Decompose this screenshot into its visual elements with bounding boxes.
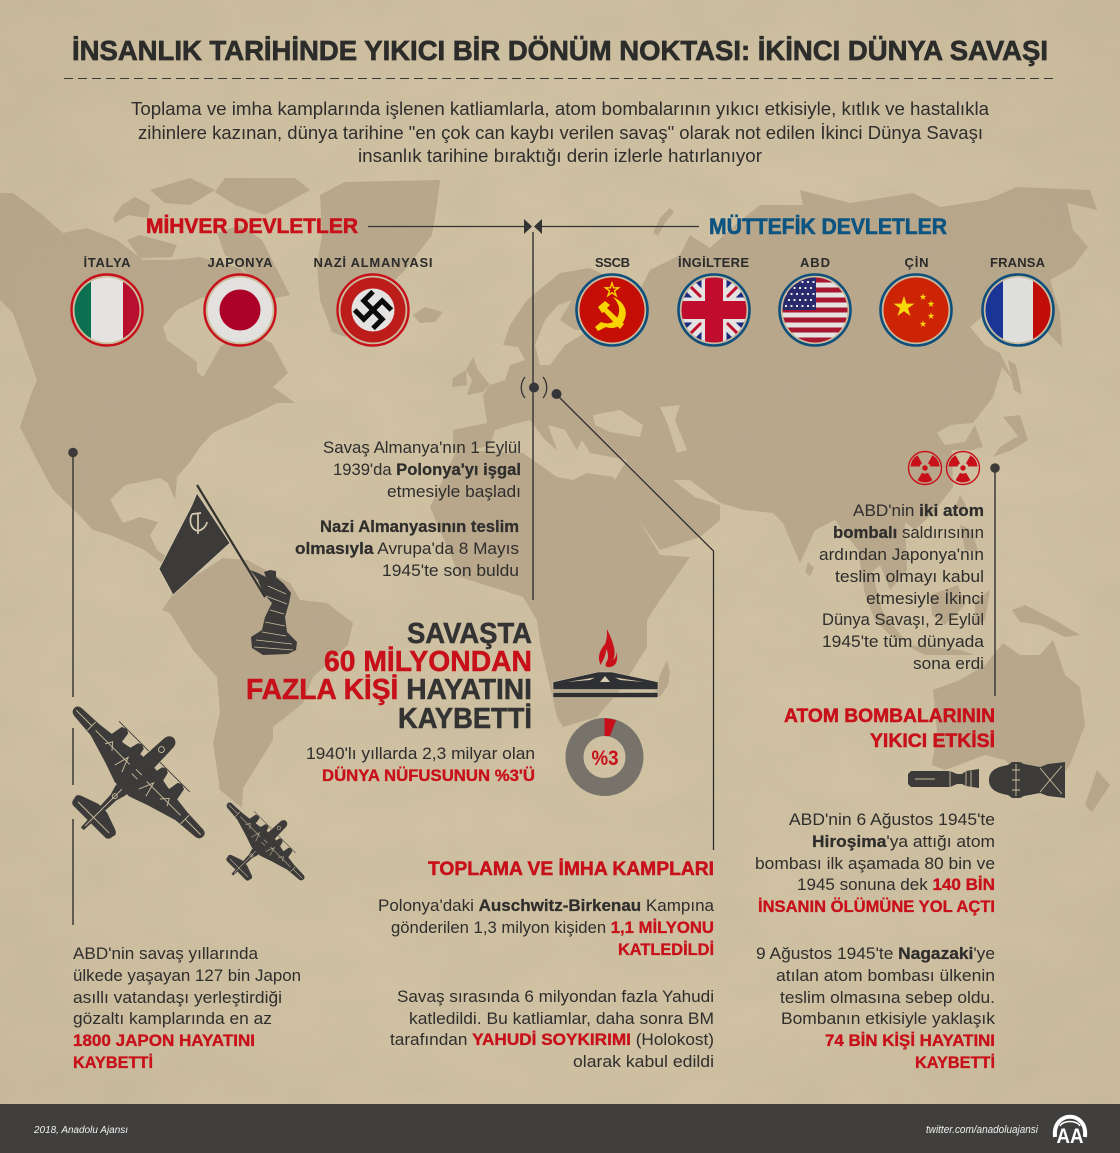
text: Auschwitz: [378, 896, 715, 959]
allied flag labels: ÇİN: [904, 255, 928, 270]
text: Nagasaki: [756, 944, 995, 1072]
leader line: camps: [552, 389, 714, 850]
world map: [0, 178, 1110, 812]
allied flag labels: SSCB: [595, 255, 630, 270]
text: Holocaust: olarak kabul edildi: [573, 1052, 714, 1071]
headline: 60 million dead: [246, 618, 532, 735]
text: Japan surrender: sona erdi: [913, 654, 984, 673]
flag: France: [982, 274, 1054, 346]
text: Holocaust: katledildi. Bu katliamlar, daha sonra BM: [409, 1009, 714, 1028]
text: Hiroshima: İNSANIN ÖLÜMÜNE YOL AÇTI: [758, 897, 995, 916]
axis flag labels: İTALYA: [84, 255, 131, 270]
axis flag labels: NAZİ ALMANYASI: [314, 255, 432, 270]
text: Japan surrender: etmesiyle İkinci: [866, 589, 984, 608]
text: Nagasaki: atılan atom bombası ülkenin: [776, 966, 995, 985]
text: Hiroshima: bombası ilk aşamada 80 bin ve: [755, 854, 995, 873]
text: Japanese internment: KAYBETTİ: [73, 1053, 153, 1072]
allied flag labels: İNGİLTERE: [678, 255, 749, 270]
text: Japan surrender: 1945'te tüm dünyada: [822, 632, 985, 651]
text: war start and end: Nazi Almanyasının teslim: [320, 517, 519, 536]
footer bar: 2018, Anadolu Ajansı: [33, 1125, 128, 1136]
text: Japanese internment: 1800 JAPON HAYATINI: [73, 1031, 255, 1050]
chart: 3 percent donut: [574, 718, 634, 787]
text: Japan surrender: teslim olmayı kabul: [835, 567, 984, 586]
text: Auschwitz: Polonya'daki Auschwitz-Birkenau Kampına: [378, 896, 715, 915]
title: İNSANLIK TARİHİNDE YIKICI BİR DÖNÜM NOKTASI: İKİNCI DÜNYA SAVAŞI: [72, 35, 1048, 66]
text: war start and end: 1939'da Polonya'yı işgal: [333, 460, 521, 479]
text: war start and end: etmesiyle başladı: [387, 482, 521, 501]
text: Japanese internment: ABD'nin savaş yıllarında: [73, 944, 259, 963]
allied flag labels: FRANSA: [990, 255, 1046, 270]
flag: United Kingdom: [678, 274, 750, 346]
central timeline line: [532, 232, 534, 600]
heading: camps: TOPLAMA VE İMHA KAMPLARI: [428, 859, 714, 880]
leader line: left: [68, 448, 78, 925]
text: Nagasaki: teslim olmasına sebep oldu.: [780, 988, 995, 1007]
text: Japanese internment: gözaltı kamplarında en az: [73, 1009, 272, 1028]
flag: Nazi Germany: [338, 274, 408, 346]
text: Holocaust: [390, 987, 714, 1071]
text: Holocaust: tarafından YAHUDİ SOYKIRIMI (Holokost): [390, 1030, 714, 1049]
text: world population: DÜNYA NÜFUSUNUN %3'Ü: [322, 766, 535, 785]
allied flag labels: [595, 255, 1046, 270]
icon: atomic bombs: [908, 762, 1065, 798]
flag: USA: [780, 274, 850, 346]
text: war start and end: [295, 438, 521, 580]
text: world population: [306, 744, 535, 785]
chart: 3 percent donut: %3: [592, 747, 618, 770]
text: Japan surrender: [819, 501, 985, 673]
text: Japanese internment: asıllı vatandaşı yerleştirdiği: [73, 988, 282, 1007]
intro paragraph: zihinlere kazınan, dünya tarihine "en çok can kaybı verilen savaş" olarak not edilen İkinci Dünya Savaşı: [138, 123, 983, 143]
text: Nagasaki: KAYBETTİ: [915, 1053, 995, 1072]
text: war start and end: olmasıyla Avrupa'da 8 Mayıs: [295, 539, 519, 558]
text: Hiroshima: Hiroşima'ya attığı atom: [812, 832, 995, 851]
text: Nagasaki: 74 BİN KİŞİ HAYATINI: [825, 1031, 995, 1050]
text: Hiroshima: [755, 810, 995, 916]
text: war start and end: 1945'te son buldu: [382, 561, 519, 580]
heading: atomic bombs: [784, 706, 995, 752]
flag: China: [880, 274, 952, 346]
logo: Anadolu Agency: AA: [1056, 1125, 1084, 1148]
text: Nagasaki: Bombanın etkisiyle yaklaşık: [781, 1009, 995, 1028]
headline: 60 million dead: KAYBETTİ: [398, 703, 532, 735]
leader line: right: [990, 463, 1000, 696]
heading: Axis powers: MİHVER DEVLETLER: [146, 215, 358, 238]
arrows between headings: [368, 219, 699, 234]
heading: Allied powers: MÜTTEFİK DEVLETLER: [709, 214, 947, 239]
headline: 60 million dead: FAZLA KİŞİ HAYATINI: [246, 674, 532, 706]
flag: Italy: [72, 274, 142, 346]
text: Japan surrender: Dünya Savaşı, 2 Eylül: [822, 610, 984, 629]
icon: large bomber: [18, 673, 238, 893]
text: Japan surrender: bombalı saldırısının: [833, 523, 984, 542]
text: Auschwitz: KATLEDİLDİ: [618, 940, 714, 959]
marker: war start location: [521, 377, 547, 398]
axis flag labels: [84, 255, 432, 270]
flag: USSR: [576, 274, 648, 346]
text: Japanese internment: [73, 944, 301, 1072]
icon: radiation signs: [908, 452, 980, 484]
footer bar: [0, 1104, 1120, 1153]
intro paragraph: Toplama ve imha kamplarında işlenen katliamlarla, atom bombalarının yıkıcı etkisiyle, kıtlık ve hastalıkla: [131, 99, 990, 119]
headline: 60 million dead: SAVAŞTA: [407, 618, 532, 650]
footer bar: twitter.com/anadoluajansi: [926, 1124, 1038, 1136]
text: war start and end: Savaş Almanya'nın 1 Eylül: [323, 438, 521, 457]
text: Auschwitz: gönderilen 1,3 milyon kişiden 1,1 MİLYONU: [391, 918, 714, 937]
icon: soldier raising flag: [159, 485, 297, 655]
text: world population: 1940'lı yıllarda 2,3 milyar olan: [306, 744, 535, 763]
headline: 60 million dead: 60 MİLYONDAN: [324, 646, 532, 678]
text: Nagasaki: 9 Ağustos 1945'te Nagazaki'ye: [756, 944, 995, 963]
heading: atomic bombs: YIKICI ETKİSİ: [870, 731, 995, 752]
text: Hiroshima: ABD'nin 6 Ağustos 1945'te: [789, 810, 995, 829]
allied flag labels: ABD: [800, 255, 830, 270]
icon: small bomber: [194, 783, 324, 913]
text: Japan surrender: ABD'nin iki atom: [853, 501, 984, 520]
text: Hiroshima: 1945 sonuna dek 140 BİN: [797, 875, 995, 894]
heading: atomic bombs: ATOM BOMBALARININ: [784, 706, 995, 727]
text: Japanese internment: ülkede yaşayan 127 bin Japon: [73, 966, 301, 985]
intro paragraph: [131, 99, 990, 166]
intro paragraph: insanlık tarihine bıraktığı derin izlerle hatırlanıyor: [358, 146, 762, 166]
text: Holocaust: Savaş sırasında 6 milyondan fazla Yahudi: [397, 987, 714, 1006]
icon: eternal flame: [553, 629, 658, 698]
flag: Japan: [204, 274, 276, 346]
text: Japan surrender: ardından Japonya'nın: [819, 545, 984, 564]
axis flag labels: JAPONYA: [208, 255, 273, 270]
logo: Anadolu Agency: [1055, 1117, 1085, 1148]
